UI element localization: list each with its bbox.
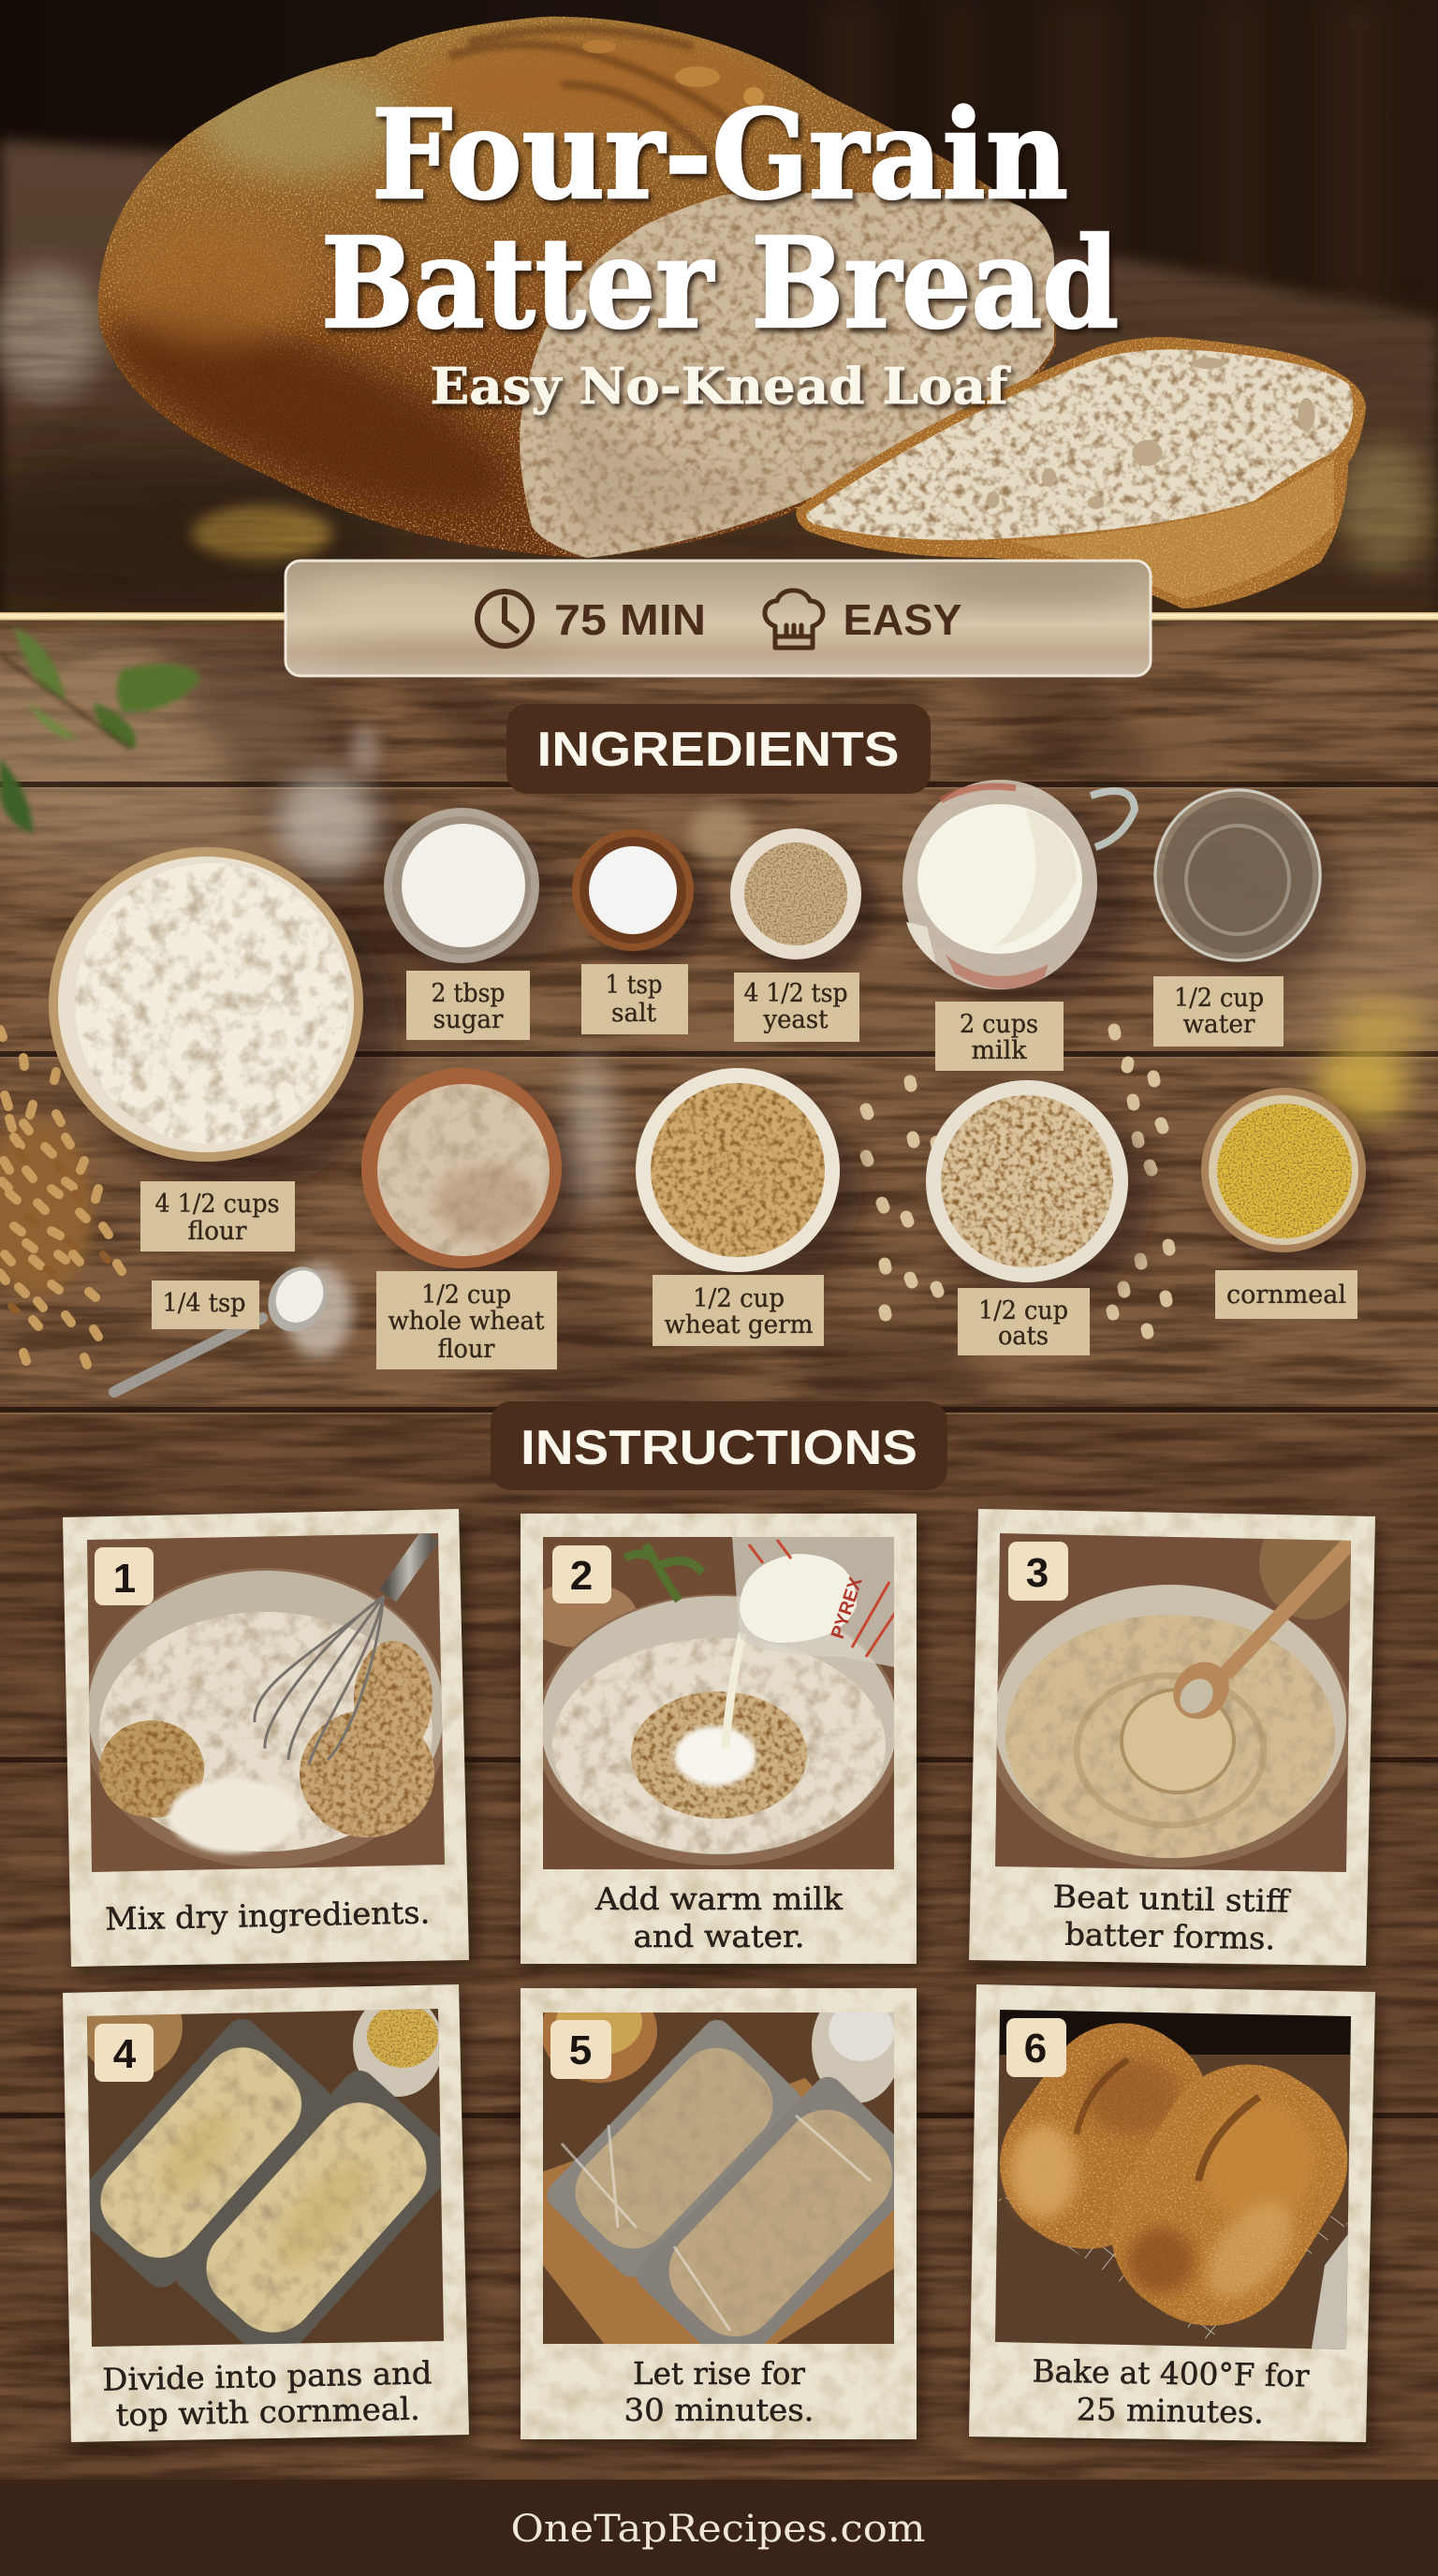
label: wheat germ: wheat germ (665, 1310, 813, 1339)
time text: 75 MIN (554, 595, 706, 644)
label: oats: oats (998, 1322, 1049, 1351)
cup lettering: PYREX (828, 1574, 867, 1642)
step number 3: 3 (1026, 1550, 1049, 1596)
label: oats: 1/2 cup (978, 1296, 1068, 1325)
label: yeast: yeast (763, 1005, 829, 1034)
label: milk: 2 cups (960, 1010, 1038, 1039)
bowl: salt (572, 829, 712, 968)
section heading: instructions (491, 1401, 947, 1490)
wheat grains spill (0, 1030, 122, 1365)
bowl: cornmeal (1201, 1088, 1387, 1273)
label: milk: milk (972, 1036, 1027, 1065)
footer bar (0, 2480, 1438, 2576)
step number 6: 6 (1024, 2026, 1047, 2071)
gold divider (0, 612, 1438, 621)
title: Four-Grain (372, 82, 1068, 227)
label: quarter teaspoon: 1/4 tsp (163, 1289, 245, 1318)
spoon: baking soda (114, 1256, 352, 1392)
label: salt (581, 964, 688, 1034)
bowl: oats (926, 1080, 1152, 1305)
icon: clock (477, 592, 532, 646)
step text 5: 30 minutes. (624, 2392, 814, 2428)
label: wheat germ: 1/2 cup (693, 1284, 785, 1313)
step number 6 (1006, 2018, 1066, 2077)
label: sugar: 2 tbsp (431, 979, 506, 1008)
label: flour: 4 1/2 cups (155, 1190, 279, 1219)
label: milk (935, 1002, 1064, 1071)
bowl: wheat germ (636, 1068, 861, 1294)
photo: rising under plastic (538, 1980, 932, 2376)
label: quarter teaspoon (152, 1281, 259, 1329)
section heading: ingredients: INGREDIENTS (537, 723, 899, 777)
step text 3: batter forms. (1064, 1916, 1276, 1956)
step text 3: Beat until stiff (1052, 1878, 1292, 1920)
difficulty text: EASY (843, 595, 962, 644)
title: Batter Bread (321, 211, 1119, 357)
section heading: instructions: INSTRUCTIONS (521, 1421, 917, 1475)
label: salt: salt (611, 999, 656, 1028)
loaf crust (85, 17, 1056, 558)
wood table background (0, 620, 1438, 2490)
bowl: flour (49, 847, 398, 1193)
label: water: 1/2 cup (1174, 984, 1264, 1013)
label: flour: flour (187, 1217, 247, 1246)
icon: chef hat (765, 591, 823, 648)
label: yeast: 4 1/2 tsp (743, 979, 848, 1008)
glass: water (1153, 788, 1345, 983)
step text 1: Mix dry ingredients. (105, 1894, 431, 1938)
subtitle: Easy No-Knead Loaf (431, 358, 1011, 416)
oat flakes scatter (866, 1030, 1169, 1333)
hero photo: bread loaf on table (0, 0, 1438, 620)
step text 2: and water. (633, 1918, 805, 1954)
step text 3 (1051, 1878, 1292, 1957)
step text 6 (1032, 2352, 1310, 2432)
step number 5 (550, 2020, 611, 2079)
step card 6 (969, 1984, 1381, 2449)
step text 5: Let rise for (633, 2355, 805, 2392)
step text 4 (102, 2354, 433, 2434)
step text 2: Add warm milk (594, 1881, 844, 1917)
label: water (1153, 976, 1284, 1046)
label: whole wheat flour: 1/2 cup (421, 1281, 511, 1310)
label: whole wheat flour (376, 1271, 557, 1369)
photo: beating batter (987, 1507, 1362, 1881)
label: cornmeal: cornmeal (1226, 1281, 1346, 1310)
step number 4: 4 (113, 2031, 137, 2077)
step card 1 (63, 1509, 476, 1975)
bowl: sugar (384, 808, 562, 983)
label: whole wheat flour: whole wheat (388, 1307, 545, 1336)
step text 5 (624, 2355, 814, 2428)
photo: mixing dry ingredients (80, 1526, 454, 1881)
label: oats (958, 1288, 1090, 1355)
step text 2 (594, 1881, 844, 1954)
label: wheat germ (653, 1275, 824, 1346)
step card 4 (63, 1975, 473, 2450)
flour dust and spills (276, 724, 1428, 1212)
step number 2 (552, 1545, 611, 1603)
photo: baked loaves on rack (969, 1992, 1381, 2359)
photo: batter in pans (66, 1975, 465, 2371)
step card 3 (969, 1507, 1379, 1973)
step text 4: Divide into pans and (102, 2354, 433, 2398)
step number 1 (95, 1547, 154, 1605)
footer bar: OneTapRecipes.com (511, 2508, 925, 2551)
step card 2 (521, 1514, 920, 1971)
label: salt: 1 tsp (605, 971, 663, 1000)
bread slice (796, 337, 1366, 608)
loaf cut face (520, 193, 1054, 558)
measuring cup: milk (902, 780, 1135, 1006)
step text 6: Bake at 400°F for (1032, 2352, 1310, 2394)
leaves (0, 627, 201, 833)
label: flour (140, 1181, 295, 1251)
step number 2: 2 (570, 1553, 593, 1599)
label: water: water (1183, 1010, 1255, 1039)
bowl: whole wheat flour (361, 1068, 583, 1290)
step number 3 (1008, 1542, 1068, 1601)
step text 4: top with cornmeal. (115, 2391, 420, 2433)
label: yeast (734, 973, 859, 1042)
info pill: time and difficulty (286, 561, 1151, 676)
photo: adding milk and water (543, 1537, 894, 1869)
label: sugar: sugar (433, 1005, 504, 1034)
label: cornmeal (1215, 1270, 1357, 1319)
step card 5 (521, 1980, 932, 2447)
title (321, 82, 1119, 357)
bowl: yeast (730, 828, 880, 977)
step text 6: 25 minutes. (1077, 2391, 1264, 2431)
label: sugar (406, 971, 530, 1040)
step number 4 (95, 2024, 154, 2082)
step number 5: 5 (569, 2027, 592, 2073)
section heading: ingredients (506, 704, 931, 794)
label: whole wheat flour: flour (438, 1335, 495, 1364)
step number 1: 1 (113, 1556, 136, 1602)
